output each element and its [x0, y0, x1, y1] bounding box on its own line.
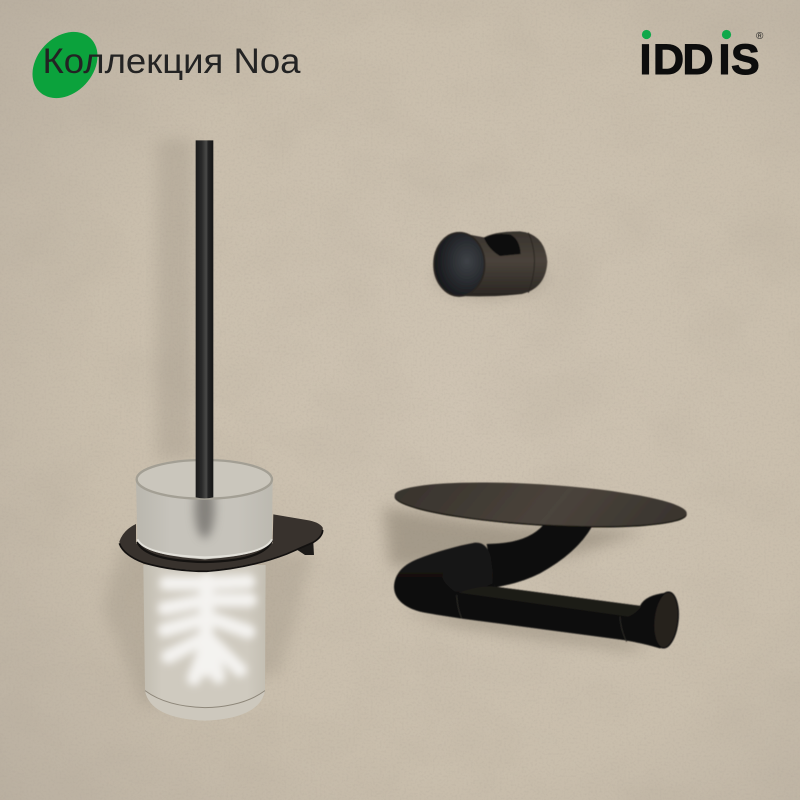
- brush bristles: [165, 580, 250, 678]
- holder shadow under shelf: [383, 507, 647, 570]
- hook shadow: [435, 255, 545, 298]
- product: robe hook: [434, 231, 547, 298]
- support arm: [487, 525, 592, 587]
- brush handle rod: [196, 140, 213, 498]
- tube top highlight: [415, 543, 493, 592]
- upper frosted cup: [136, 479, 273, 559]
- round shelf: [393, 475, 688, 533]
- title: Коллекция Noa: [42, 42, 301, 81]
- heading: collection name with green blob: [19, 19, 301, 111]
- logo: IDDIS: [640, 30, 764, 84]
- lower frosted glass: [143, 565, 266, 721]
- logo green dots: [642, 30, 731, 39]
- holder seams: [457, 595, 627, 642]
- wall bracket: [295, 543, 314, 555]
- logo wordmark: IDDIS: [640, 36, 760, 84]
- glass base: [145, 691, 265, 721]
- ring inner dark edge: [137, 540, 272, 562]
- hook slot: [484, 234, 521, 256]
- ring shelf: [119, 514, 323, 571]
- hook body: [458, 231, 547, 296]
- product: paper holder with shelf: [383, 475, 688, 650]
- cup opening: [137, 460, 272, 499]
- brush shadow: [103, 540, 313, 707]
- rod shadow on wall: [157, 140, 193, 460]
- hook seam: [528, 233, 534, 293]
- end cap: [651, 591, 681, 649]
- hook face: [434, 233, 485, 296]
- flat top of bar: [458, 586, 642, 617]
- roll tube: [394, 543, 678, 648]
- cup central shadow: [195, 478, 215, 538]
- cup bottom rim: [137, 539, 272, 557]
- registered mark: ®: [756, 31, 764, 42]
- product: toilet brush holder: [103, 140, 323, 721]
- icon: green blob: [19, 19, 111, 111]
- holder shadow under bar: [400, 610, 653, 650]
- shelf dark underside: [393, 477, 688, 535]
